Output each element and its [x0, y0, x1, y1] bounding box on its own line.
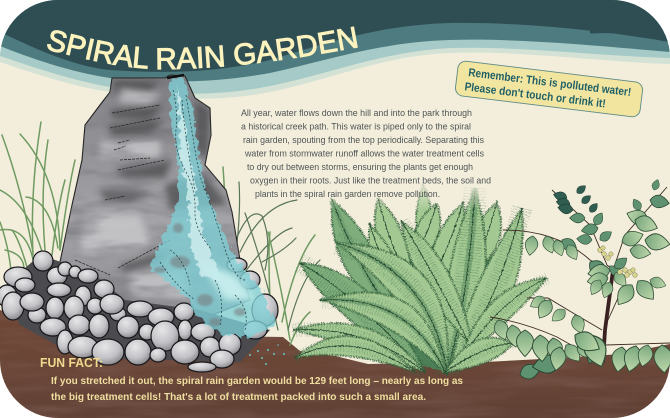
- fade over fern tips: [329, 182, 500, 209]
- fun fact text: FUN FACT:: [40, 355, 103, 370]
- description text block: [241, 108, 491, 200]
- shrub flower clusters: [598, 246, 637, 277]
- pile of pebbles: [0, 251, 278, 372]
- right grass: [223, 167, 320, 345]
- waterfall cascade: [150, 75, 275, 338]
- shrub trunk and stems: [490, 187, 670, 362]
- fun fact text: [40, 355, 463, 403]
- callout: polluted water warning: Remember: This is polluted water!: [468, 67, 632, 99]
- description text block: a historical creek path. This water is piped only to the spiral: [241, 122, 471, 132]
- left grass: [0, 122, 75, 282]
- dark upper leaflets: [553, 185, 598, 214]
- description text block: water from stormwater runoff allows the water treatment cells: [244, 148, 484, 160]
- shrub light leaflets: [492, 207, 670, 374]
- main stone: [50, 75, 250, 325]
- fern: [293, 185, 547, 372]
- description text block: to dry out between storms, ensuring the plants get enough: [247, 162, 473, 173]
- description text block: rain garden, spouting from the top periodically. Separating this: [243, 135, 484, 146]
- description text block: plants in the spiral rain garden remove pollution.: [255, 189, 440, 200]
- fun fact text: the big treatment cells! That's a lot of treatment packed into such a small area.: [51, 391, 426, 403]
- shrub mid leaflets: [518, 178, 670, 382]
- fun fact text: If you stretched it out, the spiral rain garden would be 129 feet long – nearly as long as: [51, 375, 463, 387]
- flowering shrub: [490, 178, 670, 382]
- header wave band: [0, 0, 670, 99]
- callout: polluted water warning: Please don't touch or drink it!: [464, 81, 606, 110]
- stone shading: [100, 80, 228, 272]
- soil ground: [0, 305, 670, 418]
- title: SPIRAL RAIN GARDEN: [47, 26, 358, 70]
- description text block: oxygen in their roots. Just like the treatment beds, the soil and: [250, 176, 491, 186]
- callout: polluted water warning: [455, 60, 643, 118]
- description text block: All year, water flows down the hill and into the park through: [241, 108, 472, 119]
- water splash droplets: [249, 344, 285, 365]
